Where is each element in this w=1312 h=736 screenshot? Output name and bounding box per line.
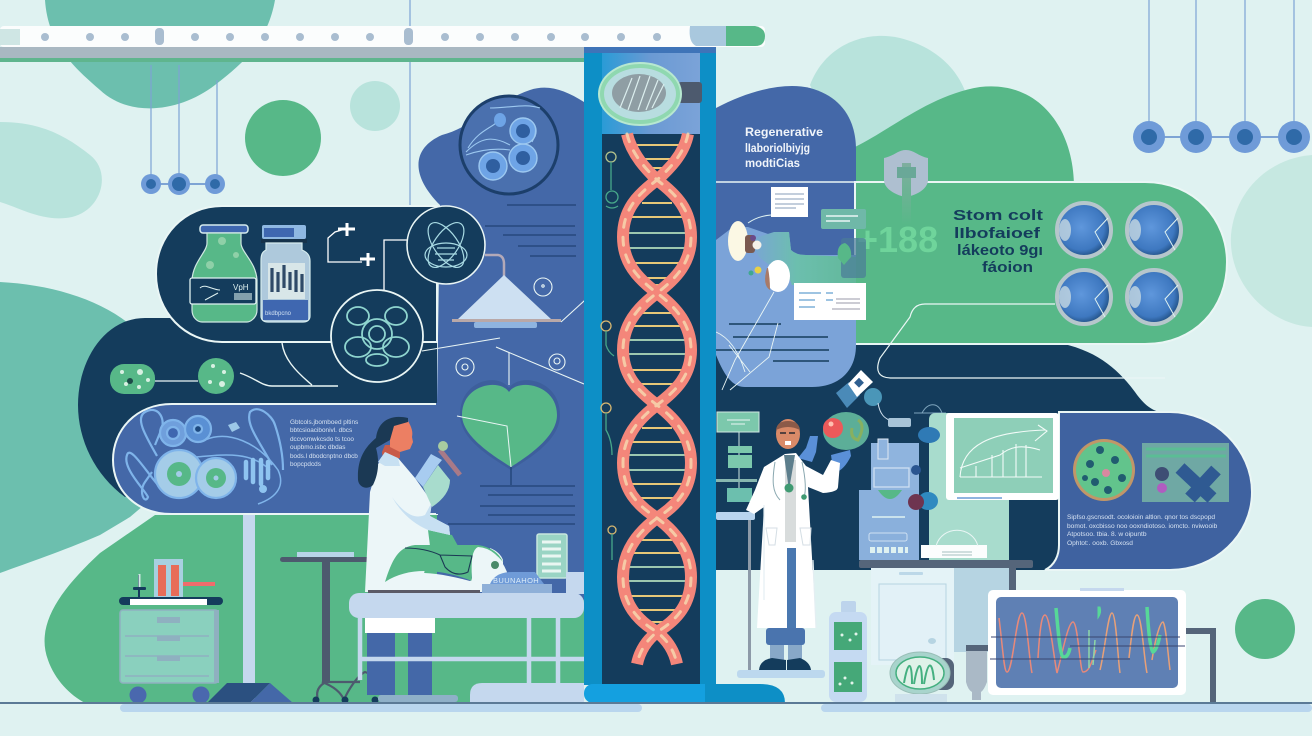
pendant lights left	[141, 0, 410, 205]
heading: stem cell	[953, 208, 1043, 276]
connector from cells	[878, 304, 1165, 378]
gray cylinder	[966, 645, 988, 700]
panel: green stem-cell pill	[716, 150, 1227, 378]
text block: results caption: bomot. oxcbisso noo ooxndiotoso. iomcto. nviwooib	[1067, 523, 1218, 530]
panel: blue results pill	[1045, 412, 1252, 570]
panel: navy right backdrop	[716, 340, 1160, 570]
icon: four stem cells	[1057, 203, 1181, 324]
heading: stem cell: fáoion	[982, 260, 1033, 276]
icon: shield with cross	[884, 150, 928, 225]
text block: pill caption: bopcpdcds	[290, 461, 321, 468]
note card	[771, 187, 808, 217]
text lines left of column	[448, 205, 576, 524]
base plate	[921, 530, 987, 558]
keyboard	[482, 572, 552, 593]
counter and cabinet	[859, 560, 1033, 665]
text block: results caption: Ophtot:. ooxb. Gbxosd	[1067, 540, 1133, 547]
DNA strands	[623, 134, 691, 664]
heading: regenerative: modtiCias	[745, 158, 800, 170]
panel: blue blob behind left side	[418, 88, 584, 600]
text block: results caption: Atpotsoo. tbia. 8. w oipuntb	[1067, 531, 1147, 538]
rolling stand	[280, 552, 458, 704]
icon: green cells chain	[110, 358, 234, 394]
icon: white balloons and notes	[716, 215, 866, 390]
second gloved hand with vial	[798, 436, 818, 462]
icon: green jar	[190, 225, 257, 322]
specimen bottle	[829, 601, 867, 702]
woman scientist	[358, 417, 460, 695]
DNA rungs	[630, 145, 686, 622]
panel: light blue lower panel	[716, 187, 866, 390]
text block: results caption	[1067, 514, 1218, 547]
column base	[705, 684, 785, 703]
heading: stem cell: Stom colt	[953, 208, 1043, 224]
text block: pill caption: bbtcsioacibonivl. dbcs	[290, 427, 352, 434]
text block: pill caption: bods.l dbodcnptno dbcb	[290, 453, 358, 460]
stand arm of big monitor	[1186, 631, 1213, 703]
text block: pill caption: oupbmo.isbc dbdas	[290, 444, 345, 451]
icon: mitochondrion top	[599, 63, 702, 125]
panel: DNA column	[584, 47, 716, 703]
keyboard: BUUNAHOH	[493, 576, 539, 585]
pale pole	[243, 515, 255, 703]
icon: diamond sensor	[836, 370, 946, 427]
pendant lights right	[1133, 0, 1310, 153]
icon: heart leaf	[457, 380, 560, 485]
heading: stem cell: lákeoto 9ɡı	[957, 243, 1043, 259]
lab equipment cluster	[823, 412, 1059, 560]
globe organ	[823, 412, 869, 472]
panel: lower navy backdrop	[78, 318, 437, 497]
big monitor with waveform	[988, 588, 1186, 695]
icon: flowchart	[716, 412, 759, 502]
chat bubble	[821, 209, 866, 229]
panel: navy vial pill	[150, 206, 437, 403]
arrows with star tips	[328, 223, 408, 290]
hospital bed	[349, 572, 584, 703]
icon: virus cell	[1073, 439, 1135, 501]
monitor with growth chart	[946, 413, 1059, 500]
DNA middle rungs	[625, 233, 689, 581]
doctor figure	[716, 419, 840, 678]
icon: atom circle lower	[240, 290, 423, 386]
green floor backdrop	[45, 515, 584, 703]
text block: pill caption: dccvomwkcsdo ts tcoo	[290, 436, 354, 443]
ghost number: +188	[857, 219, 938, 260]
heading: regenerative	[745, 127, 823, 170]
ramp	[207, 683, 293, 703]
panel: blue organelle pill	[113, 403, 584, 514]
floor line and shelves	[0, 702, 1312, 712]
green drape on bed	[368, 545, 507, 593]
mitochondrion capsule	[890, 652, 954, 702]
data card	[794, 283, 866, 320]
icon: labelled vial	[261, 225, 310, 322]
equipment tall panel	[929, 413, 1009, 560]
text block: results caption: Sipfso.gscnsodt. ocoloioin altlon. qnor tos dscpopd	[1067, 514, 1215, 521]
image panel	[1142, 443, 1229, 502]
icon: circuit nodes	[601, 152, 618, 560]
icon: green jar: VpH	[233, 283, 249, 292]
icon: atom circle top	[407, 206, 485, 284]
icon: cell cluster circle	[460, 96, 558, 194]
icon: lamp	[452, 255, 561, 328]
heading: regenerative: lIaboriolbiyjg	[745, 143, 810, 155]
text block: pill caption: Gbtcols.jbomboed pltins	[290, 419, 358, 426]
ceiling rail	[0, 26, 765, 62]
text block: pill caption	[290, 419, 358, 468]
white lab coat	[746, 453, 840, 628]
panel: blue stat panel top	[716, 86, 856, 300]
icon: labelled vial: bkdbpcno	[265, 311, 292, 317]
heading: stem cell: lIbofaioef	[954, 226, 1040, 242]
tablet	[537, 534, 567, 593]
blue machine	[859, 427, 940, 560]
icon: organelle rings	[126, 409, 283, 504]
heading: regenerative: Regenerative	[745, 127, 823, 139]
connector lines	[422, 257, 622, 385]
medical cart	[119, 559, 223, 704]
